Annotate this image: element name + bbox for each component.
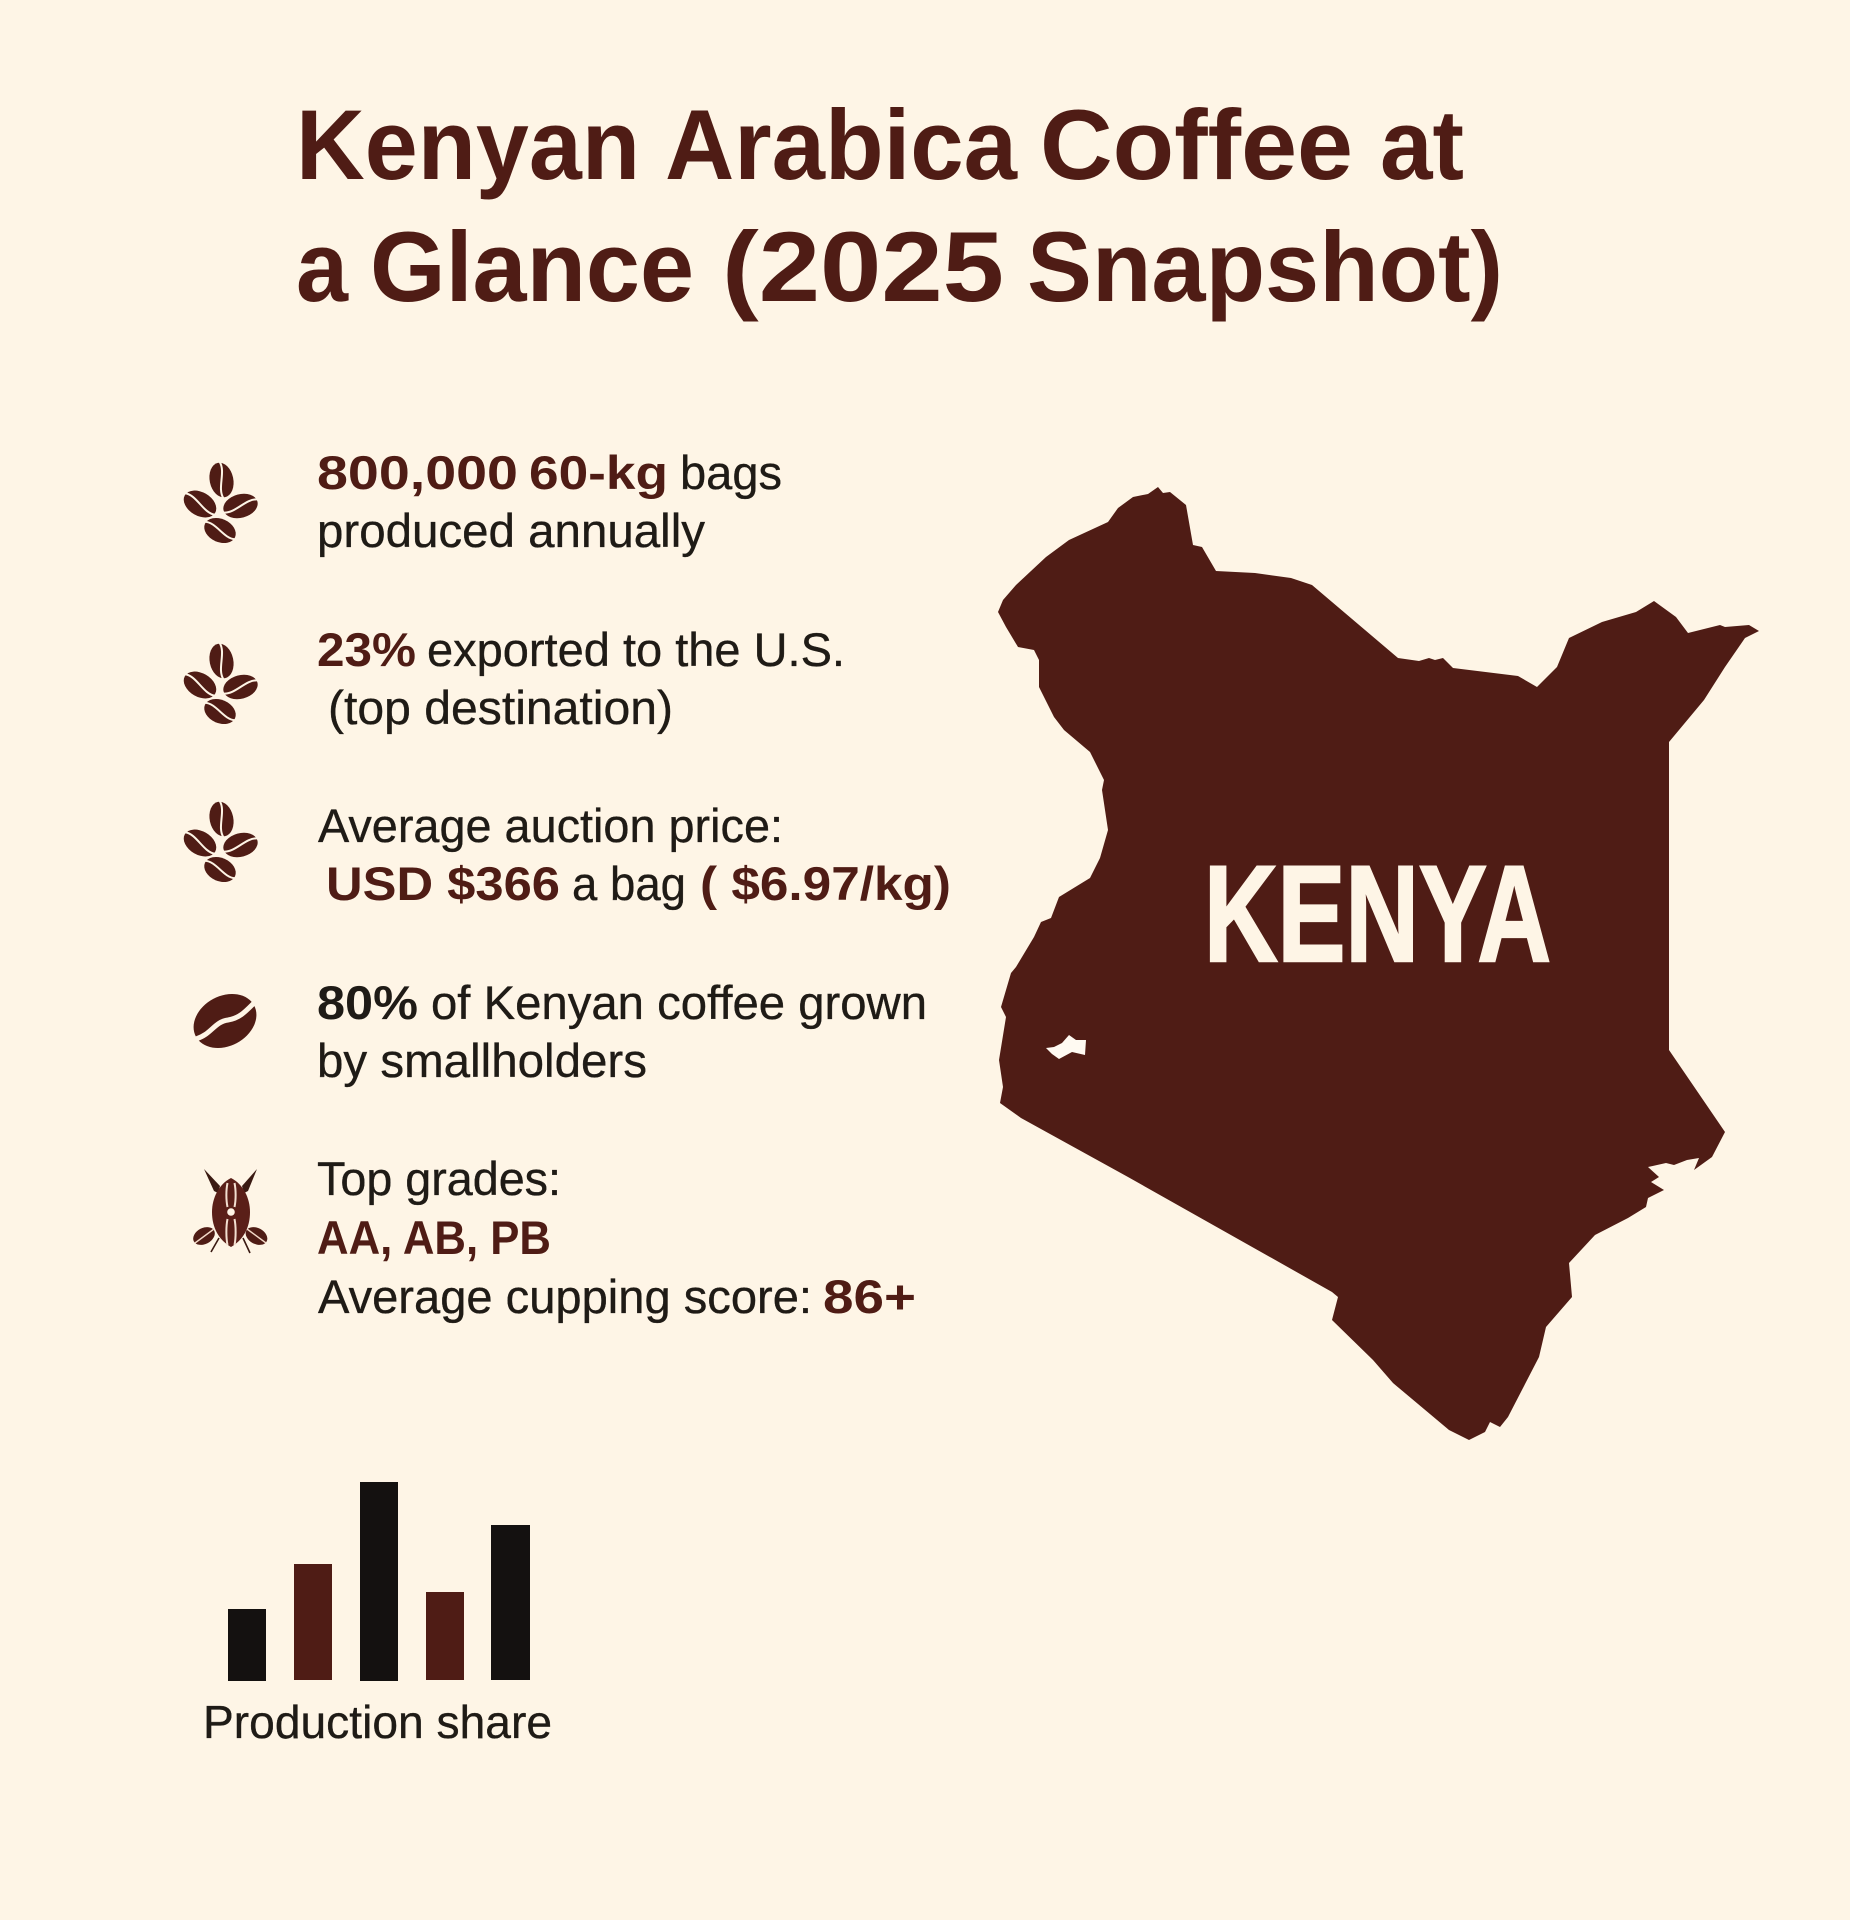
text: grades and cupping score: Average cupping score: — [318, 1270, 812, 1323]
text: production volume: bags — [680, 446, 782, 499]
icon: coffee beans cluster, production — [179, 460, 261, 548]
title: Arabica — [665, 89, 1018, 200]
text: U.S. exports — [317, 623, 845, 734]
text: auction price: USD $366 — [326, 857, 560, 910]
text: auction price — [318, 799, 951, 910]
text: production volume — [317, 446, 782, 557]
text: production volume: 60-kg — [529, 446, 668, 499]
text: grades and cupping score: 86+ — [823, 1270, 916, 1323]
map: Kenya silhouette — [998, 487, 1759, 1440]
panel: facts list — [179, 446, 951, 1323]
text: smallholders: of Kenyan coffee grown — [431, 976, 927, 1029]
map label: KENYA: KENYA — [1204, 838, 1551, 991]
text: smallholders — [317, 976, 927, 1087]
lake: Turkana cut-out — [1046, 1035, 1086, 1059]
text: U.S. exports: 23% — [317, 623, 416, 676]
icon: Maasai shield with spears and beans — [190, 1169, 270, 1253]
bar chart: production share — [203, 1482, 552, 1748]
text: U.S. exports: exported to the U.S. — [427, 623, 845, 676]
title: Coffee — [1040, 89, 1353, 200]
text: grades and cupping score — [317, 1152, 916, 1323]
title: (2025 — [722, 211, 1004, 322]
text: production volume: 800,000 — [317, 446, 518, 499]
text: grades and cupping score: AA, AB, PB — [317, 1211, 551, 1264]
icon: coffee beans cluster, price — [179, 799, 261, 887]
title — [296, 89, 1503, 322]
title: Glance — [370, 211, 694, 322]
text: auction price: a bag — [572, 857, 686, 910]
text: smallholders: 80% — [317, 976, 418, 1029]
icon: coffee beans cluster, exports — [179, 641, 261, 729]
text: U.S. exports: (top destination) — [328, 681, 673, 734]
text: smallholders: by smallholders — [317, 1034, 647, 1087]
text: grades and cupping score: Top grades: — [317, 1152, 561, 1205]
text: auction price: ( $6.97/kg) — [700, 857, 951, 910]
text: production volume: produced annually — [317, 504, 706, 557]
title: at — [1380, 89, 1464, 200]
icon: single coffee bean — [184, 983, 266, 1059]
title: Kenyan — [296, 89, 640, 200]
text: auction price: Average auction price: — [318, 799, 783, 852]
title: a — [296, 211, 349, 322]
chart label: Production share — [203, 1696, 552, 1748]
title: Snapshot) — [1027, 211, 1503, 322]
